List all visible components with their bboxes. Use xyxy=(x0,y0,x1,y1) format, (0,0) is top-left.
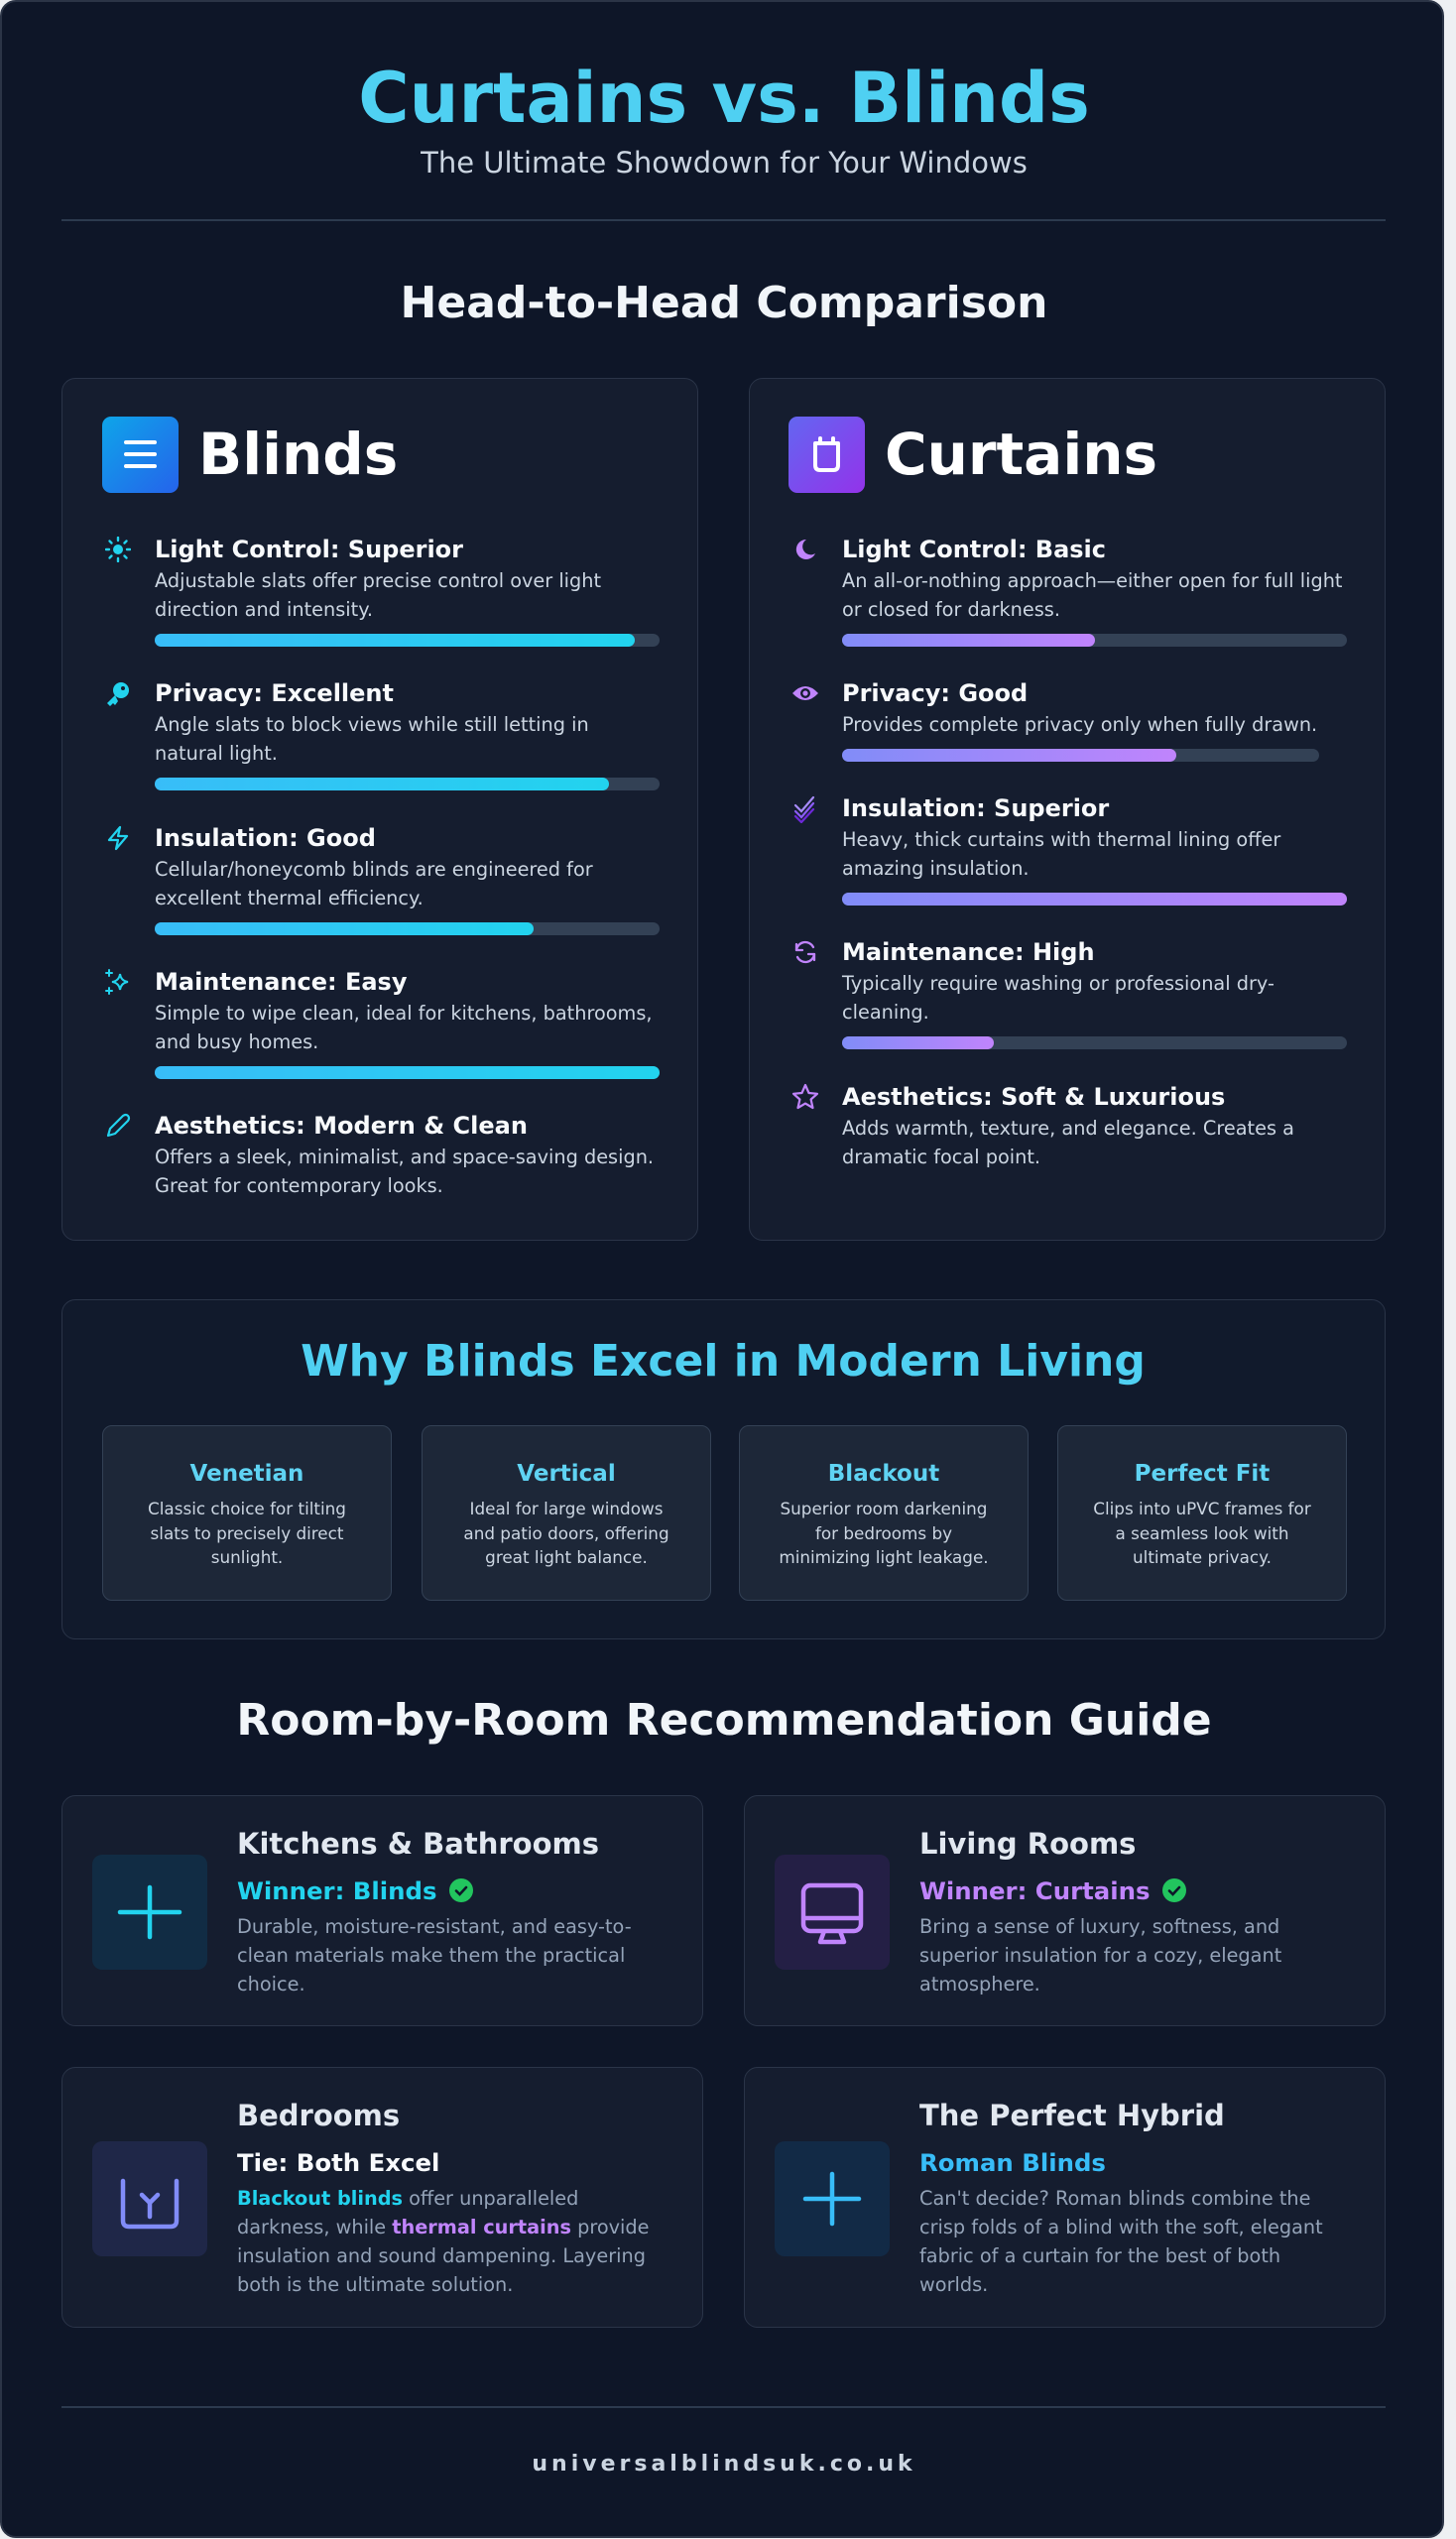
blinds item: maintenance xyxy=(105,968,660,1079)
curtains item: privacy: Privacy: Good xyxy=(842,679,1028,707)
icon: blinds xyxy=(102,417,179,493)
curtains item: aesthetics: Aesthetics: Soft & Luxurious xyxy=(842,1083,1225,1111)
curtains item: maintenance: Maintenance: High xyxy=(842,938,1095,966)
card: vertical: great light balance. xyxy=(485,1547,648,1567)
room card: living rooms: Winner: Curtains xyxy=(919,1876,1150,1905)
room card: bedrooms: darkness, while thermal curtains provide xyxy=(237,2216,649,2238)
blinds item: privacy: Angle slats to block views while still letting in xyxy=(155,713,589,736)
curtains item: light control: An all-or-nothing approach—either open for full light xyxy=(842,569,1342,592)
room card: hybrid: Roman Blinds xyxy=(919,2148,1106,2177)
heading: why blinds excel: Why Blinds Excel in Modern Living xyxy=(301,1336,1146,1387)
curtains item: insulation: amazing insulation. xyxy=(842,857,1030,880)
room card: hybrid: The Perfect Hybrid xyxy=(919,2099,1225,2132)
card: vertical: and patio doors, offering xyxy=(463,1523,669,1543)
curtains item: light control: or closed for darkness. xyxy=(842,598,1060,621)
card: venetian: Venetian xyxy=(190,1461,303,1487)
card: perfect fit: ultimate privacy. xyxy=(1133,1547,1272,1567)
card: venetian: sunlight. xyxy=(211,1547,283,1567)
room card: hybrid xyxy=(744,2067,1386,2328)
icon: plus xyxy=(92,1855,207,1970)
card: blackout: for bedrooms by xyxy=(815,1523,952,1543)
curtains item: maintenance xyxy=(795,938,1347,1049)
curtains item: aesthetics xyxy=(791,1083,1294,1168)
room card: living rooms: superior insulation for a cozy, elegant xyxy=(919,1944,1281,1967)
room card: living rooms: Living Rooms xyxy=(919,1827,1136,1861)
blinds item: maintenance: Maintenance: Easy xyxy=(155,968,407,996)
blinds item: aesthetics: Great for contemporary looks. xyxy=(155,1174,443,1197)
heading: room guide: Room-by-Room Recommendation Guide xyxy=(236,1695,1212,1746)
card: perfect fit: a seamless look with xyxy=(1115,1523,1288,1543)
room card: kitchens: Kitchens & Bathrooms xyxy=(237,1827,599,1861)
curtains item: light control: Light Control: Basic xyxy=(842,536,1106,563)
room card: living rooms: Bring a sense of luxury, softness, and xyxy=(919,1915,1279,1938)
subtitle: The Ultimate Showdown for Your Windows xyxy=(421,146,1028,180)
curtains item: aesthetics: dramatic focal point. xyxy=(842,1146,1040,1168)
blinds item: privacy xyxy=(107,679,660,790)
heading: head-to-head: Head-to-Head Comparison xyxy=(401,278,1047,328)
card: vertical xyxy=(422,1425,711,1601)
card: blackout: minimizing light leakage. xyxy=(779,1547,989,1567)
icon: bed xyxy=(92,2141,207,2256)
blinds item: maintenance: and busy homes. xyxy=(155,1030,318,1053)
blinds item: insulation: Cellular/honeycomb blinds are engineered for xyxy=(155,858,593,881)
blinds header: Blinds xyxy=(198,421,398,488)
curtains item: maintenance: cleaning. xyxy=(842,1001,929,1024)
room card: bedrooms xyxy=(61,2067,703,2328)
room card: living rooms xyxy=(744,1795,1386,2026)
icon: monitor xyxy=(775,1855,890,1970)
icon: plus xyxy=(775,2141,890,2256)
card: blackout xyxy=(739,1425,1029,1601)
curtains header: Curtains xyxy=(885,421,1157,488)
blinds item: privacy: natural light. xyxy=(155,742,278,765)
blinds item: aesthetics xyxy=(107,1112,654,1197)
blinds item: privacy: Privacy: Excellent xyxy=(155,679,394,707)
curtains item: insulation: Heavy, thick curtains with thermal lining offer xyxy=(842,828,1280,851)
title: Curtains vs. Blinds xyxy=(358,58,1090,139)
card: blackout: Blackout xyxy=(828,1461,939,1487)
room card: bedrooms: both is the ultimate solution. xyxy=(237,2273,513,2296)
blinds item: insulation: Insulation: Good xyxy=(155,824,376,852)
curtains item: privacy: Provides complete privacy only when fully drawn. xyxy=(842,713,1317,736)
panel: curtains xyxy=(749,378,1386,1241)
curtains item: light control xyxy=(795,536,1347,647)
curtains item: maintenance: Typically require washing or professional dry- xyxy=(842,972,1274,995)
blinds item: maintenance: Simple to wipe clean, ideal for kitchens, bathrooms, xyxy=(155,1002,653,1025)
card: perfect fit: Perfect Fit xyxy=(1135,1461,1270,1487)
room card: hybrid: fabric of a curtain for the best of both xyxy=(919,2244,1280,2267)
footer: universalblindsuk.co.uk xyxy=(532,2452,916,2477)
blinds item: light control: direction and intensity. xyxy=(155,598,373,621)
room card: living rooms: atmosphere. xyxy=(919,1973,1040,1995)
blinds item: light control: Adjustable slats offer precise control over light xyxy=(155,569,601,592)
card: venetian: slats to precisely direct xyxy=(151,1523,343,1543)
blinds item: insulation: excellent thermal efficiency. xyxy=(155,887,424,909)
blinds item: light control xyxy=(105,536,660,647)
room card: kitchens: Winner: Blinds xyxy=(237,1876,436,1905)
room card: kitchens xyxy=(61,1795,703,2026)
panel: blinds xyxy=(61,378,698,1241)
blinds item: insulation xyxy=(107,824,660,935)
room card: kitchens: choice. xyxy=(237,1973,305,1995)
room card: bedrooms: Tie: Both Excel xyxy=(237,2148,439,2177)
room card: kitchens: Durable, moisture-resistant, and easy-to- xyxy=(237,1915,632,1938)
room card: bedrooms: Blackout blinds offer unparalleled xyxy=(237,2187,578,2210)
room card: kitchens: clean materials make them the practical xyxy=(237,1944,625,1967)
card: venetian: Classic choice for tilting xyxy=(148,1499,346,1518)
card: blackout: Superior room darkening xyxy=(781,1499,987,1518)
curtains item: insulation: Insulation: Superior xyxy=(842,794,1109,822)
blinds header xyxy=(102,417,398,493)
room card: bedrooms: Bedrooms xyxy=(237,2099,400,2132)
card: venetian xyxy=(102,1425,392,1601)
room card: hybrid: worlds. xyxy=(919,2273,988,2296)
card: vertical: Ideal for large windows xyxy=(470,1499,663,1518)
room card: hybrid: Can't decide? Roman blinds combine the xyxy=(919,2187,1311,2210)
card: perfect fit xyxy=(1057,1425,1347,1601)
curtains item: privacy xyxy=(792,679,1319,762)
curtains header xyxy=(789,417,1157,493)
curtains item: aesthetics: Adds warmth, texture, and elegance. Creates a xyxy=(842,1117,1294,1140)
blinds item: aesthetics: Offers a sleek, minimalist, and space-saving design. xyxy=(155,1146,654,1168)
blinds item: aesthetics: Aesthetics: Modern & Clean xyxy=(155,1112,528,1140)
panel: why blinds excel xyxy=(61,1299,1386,1639)
curtains item: insulation xyxy=(793,794,1347,906)
card: vertical: Vertical xyxy=(517,1461,616,1487)
icon: curtains xyxy=(789,417,865,493)
blinds item: light control: Light Control: Superior xyxy=(155,536,463,563)
room card: hybrid: crisp folds of a blind with the soft, elegant xyxy=(919,2216,1323,2238)
card: perfect fit: Clips into uPVC frames for xyxy=(1093,1499,1311,1518)
room card: bedrooms: insulation and sound dampening. Layering xyxy=(237,2244,646,2267)
